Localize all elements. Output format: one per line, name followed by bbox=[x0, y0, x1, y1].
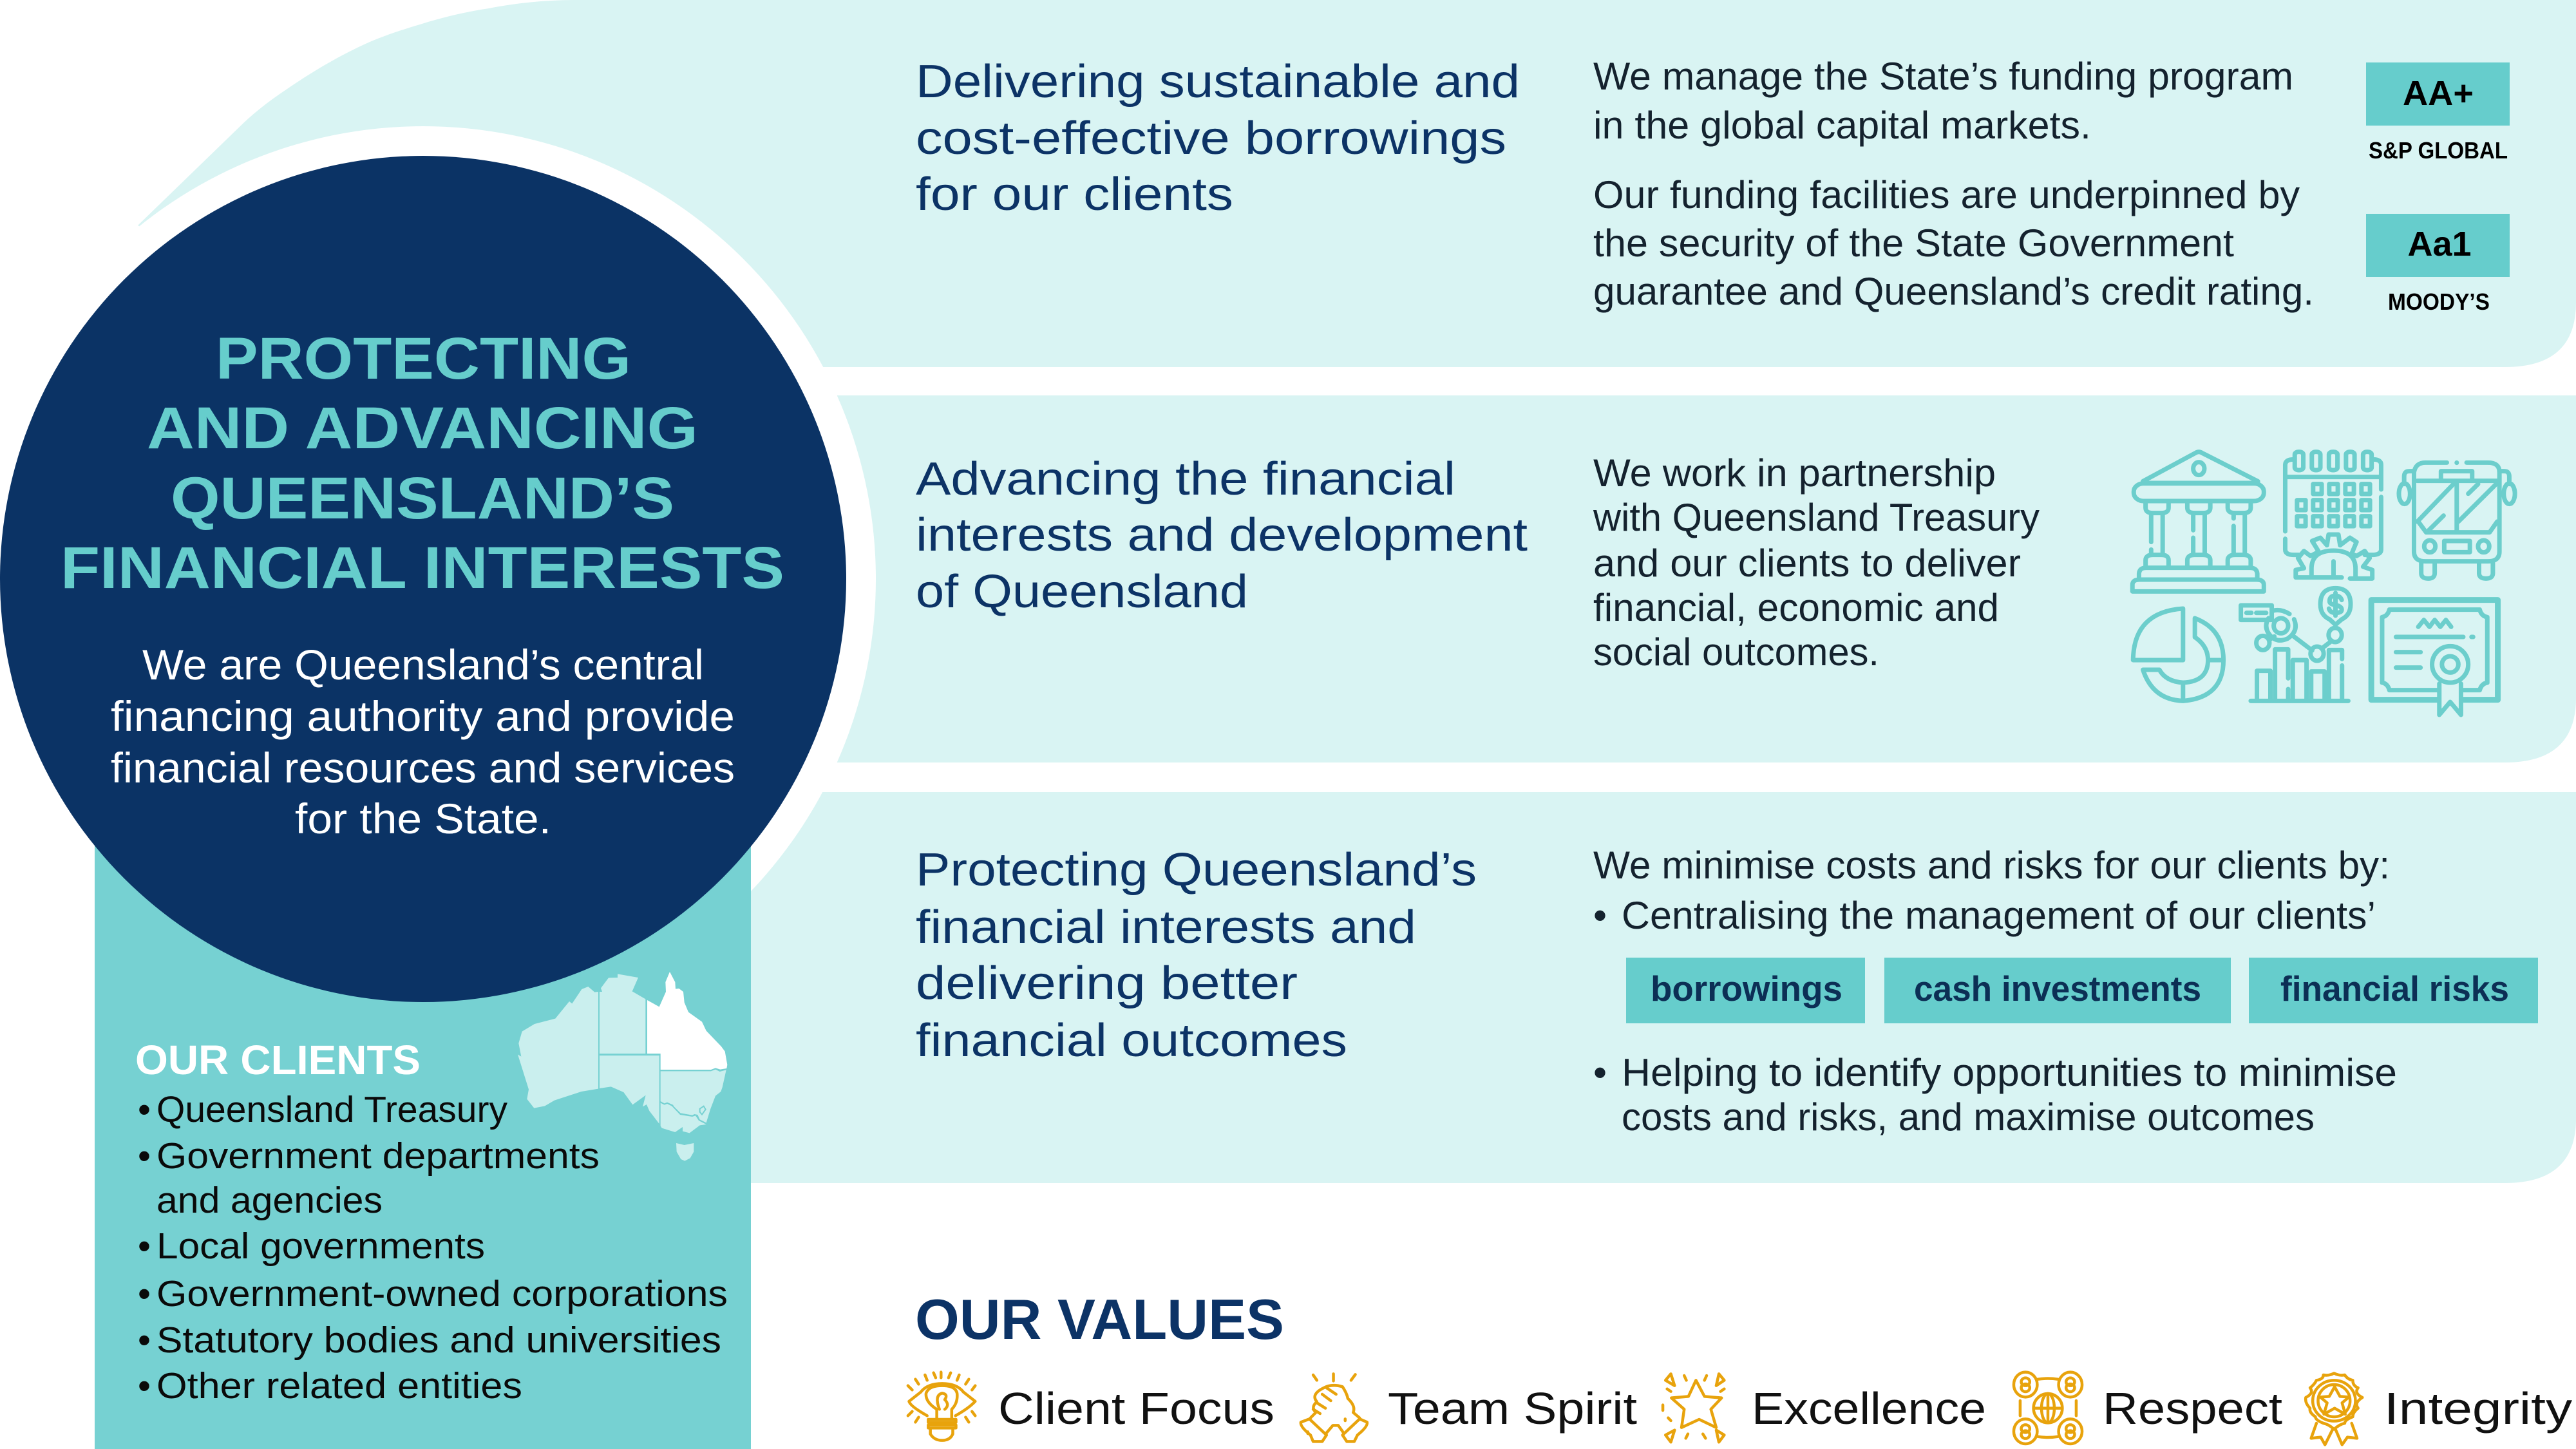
pill: financial risks: financial risks bbox=[2280, 969, 2509, 1009]
text: minimise costs intro: We minimise costs and risks for our clients by: bbox=[1593, 844, 2390, 887]
rating: S&P: S&P GLOBAL bbox=[2369, 137, 2508, 164]
heading: protecting: financial outcomes bbox=[916, 1015, 1347, 1066]
our clients heading: OUR CLIENTS bbox=[135, 1037, 421, 1083]
heading: protecting: financial interests and bbox=[916, 902, 1416, 953]
heading: protecting: Protecting Queensland’s bbox=[916, 844, 1477, 896]
text: partnership: with Queensland Treasury bbox=[1593, 496, 2040, 539]
circle title: FINANCIAL INTERESTS bbox=[61, 535, 784, 601]
heading: delivering borrowings: Delivering sustainable and bbox=[916, 56, 1520, 108]
rating: S&P bbox=[2366, 62, 2510, 164]
heading: advancing: of Queensland bbox=[916, 566, 1248, 618]
text: minimise costs intro bbox=[1593, 844, 2390, 937]
text: funding program: We manage the State’s funding program bbox=[1593, 55, 2293, 98]
panel: our clients bbox=[95, 708, 751, 1449]
our clients list: Government departments bbox=[156, 1135, 600, 1177]
rating: Moody's: Aa1 bbox=[2407, 225, 2472, 263]
our clients list: • bbox=[138, 1320, 151, 1361]
pill: borrowings bbox=[1626, 958, 1865, 1023]
icon: light bulb bbox=[908, 1372, 975, 1441]
our clients list: Other related entities bbox=[156, 1365, 522, 1406]
icon: growth chart bbox=[2241, 588, 2351, 701]
text: minimise costs intro: Centralising the management of our clients’ bbox=[1622, 894, 2376, 937]
our clients list: Local governments bbox=[156, 1226, 485, 1267]
heading: delivering borrowings: for our clients bbox=[916, 169, 1233, 220]
rating: S&P: AA+ bbox=[2403, 74, 2474, 113]
text: partnership bbox=[1593, 451, 2040, 674]
value: respect: Respect bbox=[2103, 1383, 2282, 1434]
icon: rosette bbox=[2306, 1373, 2362, 1444]
text: minimise costs intro: • bbox=[1593, 894, 1607, 937]
our clients list: • bbox=[138, 1089, 151, 1130]
icon: star bbox=[1663, 1374, 1724, 1442]
circle title: PROTECTING bbox=[216, 326, 631, 392]
map of Australia bbox=[518, 972, 727, 1161]
heading: advancing bbox=[916, 453, 1528, 618]
rating: Moody's: MOODY’S bbox=[2388, 289, 2490, 315]
text: funding program: Our funding facilities are underpinned by bbox=[1593, 173, 2300, 216]
heading: protecting: delivering better bbox=[916, 958, 1298, 1009]
circle description bbox=[111, 641, 735, 842]
our clients list: • bbox=[138, 1135, 151, 1177]
our clients list: • bbox=[138, 1365, 151, 1406]
circle description: for the State. bbox=[295, 795, 551, 842]
icon group: outcomes bbox=[2132, 452, 2515, 715]
circle title: AND ADVANCING bbox=[147, 395, 698, 461]
text: partnership: and our clients to deliver bbox=[1593, 542, 2021, 585]
heading: delivering borrowings bbox=[916, 56, 1520, 220]
circle description: financial resources and services bbox=[111, 744, 735, 791]
value: excellence: Excellence bbox=[1752, 1383, 1986, 1434]
text: helping: Helping to identify opportunities to minimise bbox=[1622, 1051, 2397, 1094]
icon: joined hands bbox=[1301, 1374, 1367, 1441]
text: helping: • bbox=[1593, 1051, 1607, 1094]
text: partnership: social outcomes. bbox=[1593, 630, 1879, 674]
value: team spirit bbox=[1301, 1374, 1637, 1441]
panel: delivering borrowings background bbox=[138, 0, 2576, 367]
value: respect bbox=[2014, 1372, 2282, 1444]
circle description: We are Queensland’s central bbox=[142, 641, 704, 688]
value: integrity: Integrity bbox=[2384, 1383, 2572, 1434]
text: partnership: We work in partnership bbox=[1593, 451, 1996, 495]
our clients list: Statutory bodies and universities bbox=[156, 1320, 721, 1361]
our clients list: Government-owned corporations bbox=[156, 1273, 728, 1314]
heading: advancing: Advancing the financial bbox=[916, 453, 1455, 505]
circle title: QUEENSLAND’S bbox=[171, 466, 674, 531]
text: partnership: financial, economic and bbox=[1593, 586, 1999, 629]
our clients list: • bbox=[138, 1273, 151, 1314]
heading: delivering borrowings: cost-effective borrowings bbox=[916, 113, 1506, 164]
our clients list: • bbox=[138, 1226, 151, 1267]
value: client focus bbox=[908, 1372, 1274, 1441]
text: funding program: the security of the State Government bbox=[1593, 222, 2234, 265]
value: excellence bbox=[1663, 1374, 1986, 1442]
heading: protecting bbox=[916, 844, 1477, 1066]
icon: calendar gauge bbox=[2285, 452, 2381, 578]
value: integrity bbox=[2306, 1373, 2572, 1444]
value: team spirit: Team Spirit bbox=[1388, 1383, 1637, 1434]
heading: advancing: interests and development bbox=[916, 509, 1528, 561]
rating: Moody's bbox=[2366, 214, 2510, 315]
our clients list: Queensland Treasury bbox=[156, 1089, 507, 1130]
circle title bbox=[61, 326, 784, 601]
pill: borrowings: borrowings bbox=[1651, 969, 1842, 1009]
icon: bus bbox=[2399, 462, 2515, 578]
pill: cash investments: cash investments bbox=[1914, 969, 2201, 1009]
pill: financial risks bbox=[2249, 958, 2538, 1023]
circle description: financing authority and provide bbox=[111, 692, 735, 740]
icon: bank bbox=[2132, 452, 2264, 591]
our clients list bbox=[138, 1089, 728, 1406]
icon: certificate bbox=[2371, 600, 2498, 715]
our clients list: and agencies bbox=[156, 1180, 383, 1221]
text: funding program: in the global capital markets. bbox=[1593, 104, 2091, 147]
text: funding program: guarantee and Queensland’s credit rating. bbox=[1593, 270, 2314, 313]
navy circle bbox=[0, 156, 846, 1002]
text: helping bbox=[1593, 1051, 2397, 1139]
panel: protecting background bbox=[708, 792, 2576, 1183]
text: helping: costs and risks, and maximise outcomes bbox=[1622, 1095, 2315, 1139]
icon: pie chart bbox=[2133, 609, 2224, 701]
text: funding program bbox=[1593, 55, 2314, 313]
panel: advancing background bbox=[773, 395, 2576, 762]
icon: people and globe bbox=[2014, 1372, 2082, 1444]
white ring around circle bbox=[0, 126, 876, 1032]
value: client focus: Client Focus bbox=[998, 1383, 1274, 1434]
pill: cash investments bbox=[1884, 958, 2231, 1023]
our values heading: OUR VALUES bbox=[915, 1287, 1284, 1351]
